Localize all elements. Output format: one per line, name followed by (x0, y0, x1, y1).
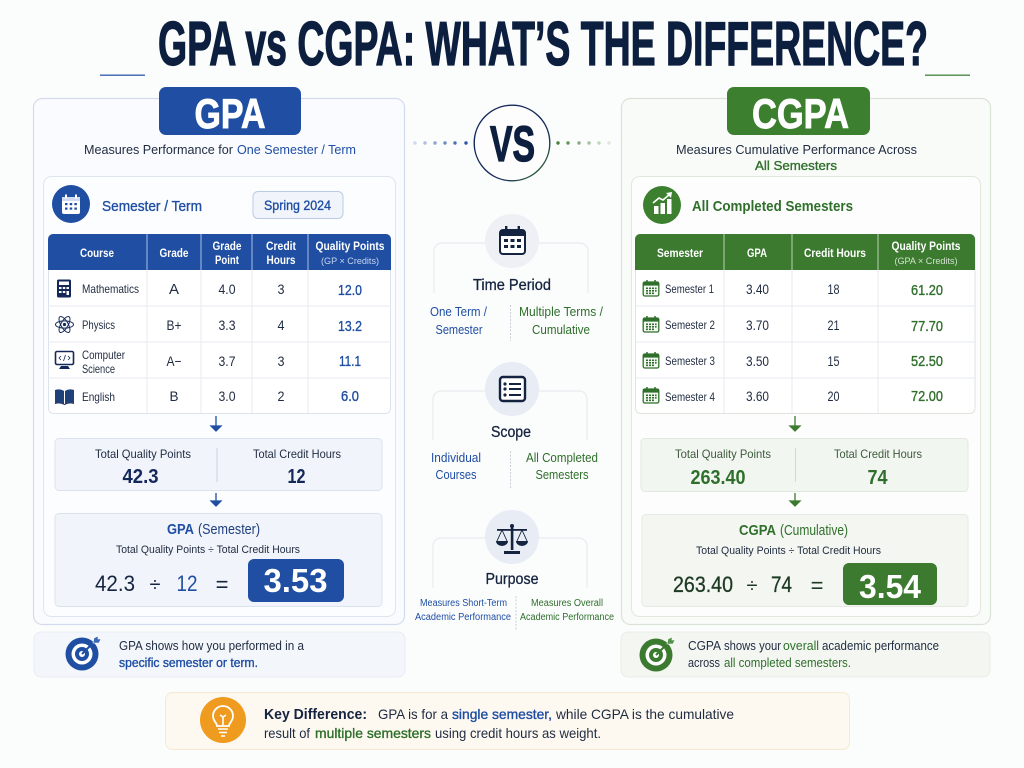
comparison: purpose (415, 510, 614, 631)
row: Physics: 3.3 (218, 317, 236, 333)
row: Semester 2: 21 (828, 317, 840, 333)
totals box: 263.40 (690, 467, 746, 489)
callout: key difference: GPA is for a (378, 706, 448, 722)
note: GPA (34, 632, 405, 677)
GPA table: Course (80, 246, 114, 260)
CGPA subtitle: All Semesters (755, 158, 837, 173)
CGPA result: 263.40 (673, 572, 733, 597)
icon: list (485, 362, 539, 416)
CGPA result: Total Quality Points ÷ Total Credit Hours (696, 545, 881, 557)
comparison: time period: Semester (436, 323, 482, 337)
totals box: Total Quality Points (675, 447, 771, 461)
row: Semester 2: 77.70 (911, 318, 943, 335)
CGPA result (642, 514, 968, 606)
CGPA table: Credit Hours (804, 246, 866, 260)
note: CGPA: shows your (724, 639, 781, 653)
GPA table: Quality Points (316, 239, 385, 253)
row: Semester 1: 18 (828, 281, 840, 297)
arrow (211, 416, 221, 431)
CGPA table: (GPA × Credits) (894, 256, 958, 267)
VS badge: VS (490, 116, 535, 172)
GPA result: GPA (167, 521, 194, 538)
row: Mathematics: A (169, 281, 179, 298)
GPA result: Total Quality Points ÷ Total Credit Hours (116, 544, 300, 556)
callout: key difference: while CGPA is the cumulative (555, 706, 734, 722)
CGPA result: 74 (771, 572, 792, 597)
comparison: scope: Scope (491, 424, 531, 441)
icon: growth chart (643, 186, 681, 224)
comparison: scope: Courses (436, 468, 476, 482)
row: Semester 4: Semester 4 (665, 390, 715, 404)
note: CGPA: CGPA (688, 639, 722, 653)
GPA table (48, 234, 391, 414)
note: CGPA: all completed semesters. (724, 656, 851, 670)
note: GPA: GPA shows how you performed in a (119, 639, 304, 653)
row: Semester 1 (643, 280, 943, 299)
row: Computer Science: 3.7 (218, 353, 236, 369)
CGPA badge: CGPA (752, 90, 849, 137)
totals box: 74 (868, 467, 888, 489)
totals box: 12 (288, 466, 306, 488)
GPA subtitle: One Semester / Term (237, 142, 356, 157)
callout: key difference: result of (264, 725, 310, 741)
comparison: purpose: Academic Performance (415, 612, 511, 623)
row: Semester 4: 3.60 (746, 388, 769, 404)
comparison: purpose: Academic Performance (520, 612, 614, 623)
comparison: scope (431, 362, 598, 488)
totals box (55, 438, 382, 490)
GPA result: = (216, 572, 228, 597)
GPA table: Grade (160, 246, 189, 260)
comparison: time period: Time Period (473, 277, 551, 294)
row: English: 3.0 (218, 388, 236, 404)
totals box: Total Credit Hours (253, 447, 341, 461)
panel: CGPA (622, 87, 990, 624)
row: Semester 2: 3.70 (746, 317, 769, 333)
GPA result: (Semester) (198, 521, 260, 538)
icon: light bulb (200, 697, 246, 743)
row: Computer Science: Computer (82, 348, 125, 362)
icon: scales (485, 510, 539, 564)
heading: semester term: Semester / Term (102, 198, 202, 215)
GPA result: 3.53 (264, 562, 328, 599)
row: Semester 3: Semester 3 (665, 354, 715, 368)
GPA result: 42.3 (95, 571, 135, 596)
row: Mathematics: Mathematics (82, 282, 139, 296)
term pill: Spring 2024 (264, 197, 331, 213)
note: CGPA: academic performance (822, 639, 939, 653)
row: Semester 1: 3.40 (746, 281, 769, 297)
comparison: purpose: Measures Overall (531, 598, 603, 609)
row: Semester 3 (643, 352, 943, 370)
totals box (641, 438, 968, 492)
CGPA result: CGPA (739, 522, 776, 539)
callout: key difference (166, 692, 850, 750)
CGPA table: Quality Points (892, 239, 961, 253)
callout: key difference: using credit hours as weight. (435, 725, 601, 741)
callout: key difference: Key Difference: (264, 706, 367, 723)
row: English (55, 388, 359, 405)
CGPA result: = (811, 573, 823, 598)
comparison: scope: All Completed (526, 451, 598, 465)
row: English: English (82, 390, 115, 404)
totals box: Total Credit Hours (834, 447, 922, 461)
row: Mathematics: 12.0 (338, 282, 362, 299)
icon: calendar (485, 214, 539, 268)
GPA table: Hours (266, 253, 296, 267)
CGPA result: (Cumulative) (780, 522, 848, 539)
GPA subtitle: Measures Performance for (84, 142, 234, 157)
GPA table: Grade (212, 239, 242, 253)
comparison: time period: Cumulative (532, 323, 590, 337)
note: CGPA: across (688, 656, 720, 670)
heading: all completed semesters: All Completed Semesters (692, 198, 853, 215)
row: Semester 3: 3.50 (746, 353, 769, 369)
row: Computer Science: 3 (278, 353, 285, 369)
arrow (211, 493, 221, 506)
row: Semester 3: 52.50 (911, 353, 943, 370)
GPA table: (GP × Credits) (321, 256, 379, 267)
CGPA result: ÷ (747, 575, 758, 597)
totals box: Total Quality Points (95, 447, 191, 461)
row: Physics: 13.2 (338, 318, 362, 335)
row: Semester 1: Semester 1 (665, 282, 714, 296)
note: GPA: specific semester or term. (119, 656, 258, 670)
arrow (790, 493, 800, 506)
icon: target (66, 636, 101, 670)
row: English: 2 (278, 388, 285, 404)
callout: key difference: multiple semesters (315, 725, 431, 741)
row: Semester 3: 15 (828, 353, 840, 369)
row: Physics: Physics (82, 318, 115, 332)
GPA result (55, 514, 382, 606)
row: Semester 4: 20 (828, 388, 840, 404)
CGPA table: Semester (657, 246, 703, 260)
row: Physics: B+ (166, 317, 182, 333)
row: English: B (170, 388, 178, 404)
row: Mathematics (57, 280, 362, 299)
GPA result: ÷ (150, 574, 161, 596)
row: Physics (56, 315, 362, 335)
row: Physics: 4 (278, 317, 285, 333)
GPA table: Point (215, 253, 239, 267)
comparison: scope: Individual (431, 451, 481, 465)
comparison: purpose: Purpose (486, 571, 539, 588)
row: Semester 4 (643, 387, 943, 405)
totals box: 42.3 (122, 466, 158, 488)
callout: key difference: single semester, (452, 706, 552, 722)
term pill (253, 192, 343, 218)
comparison: time period: One Term / (430, 305, 487, 319)
comparison: time period: Multiple Terms / (519, 305, 604, 319)
GPA badge: GPA (194, 90, 266, 137)
CGPA subtitle (676, 142, 917, 173)
icon: calendar (52, 185, 90, 223)
row: Semester 2: Semester 2 (665, 318, 715, 332)
panel: GPA (34, 87, 404, 624)
row: Computer Science: 11.1 (339, 353, 361, 370)
comparison: scope: Semesters (536, 468, 588, 482)
row: Semester 4: 72.00 (911, 388, 943, 405)
CGPA result: 3.54 (859, 568, 922, 605)
GPA badge (159, 87, 301, 137)
row: English: 6.0 (341, 388, 359, 405)
comparison: time period (430, 214, 604, 341)
row: Mathematics: 3 (278, 281, 285, 297)
CGPA table (635, 234, 975, 414)
row: Semester 1: 61.20 (911, 282, 943, 299)
row: Computer Science (56, 348, 361, 376)
icon: target (640, 637, 675, 672)
note: CGPA (621, 632, 990, 677)
GPA result: 12 (176, 571, 198, 596)
row: Mathematics: 4.0 (218, 281, 236, 297)
CGPA table: GPA (747, 246, 767, 260)
VS badge (413, 105, 611, 181)
row: Computer Science: Science (82, 362, 115, 376)
arrow (790, 416, 800, 431)
row: Semester 2 (643, 316, 943, 335)
comparison: purpose: Measures Short-Term (420, 598, 507, 609)
GPA table: Credit (266, 239, 296, 253)
note: CGPA: overall (783, 639, 819, 653)
row: Computer Science: A− (166, 353, 182, 369)
CGPA subtitle: Measures Cumulative Performance Across (676, 142, 917, 157)
